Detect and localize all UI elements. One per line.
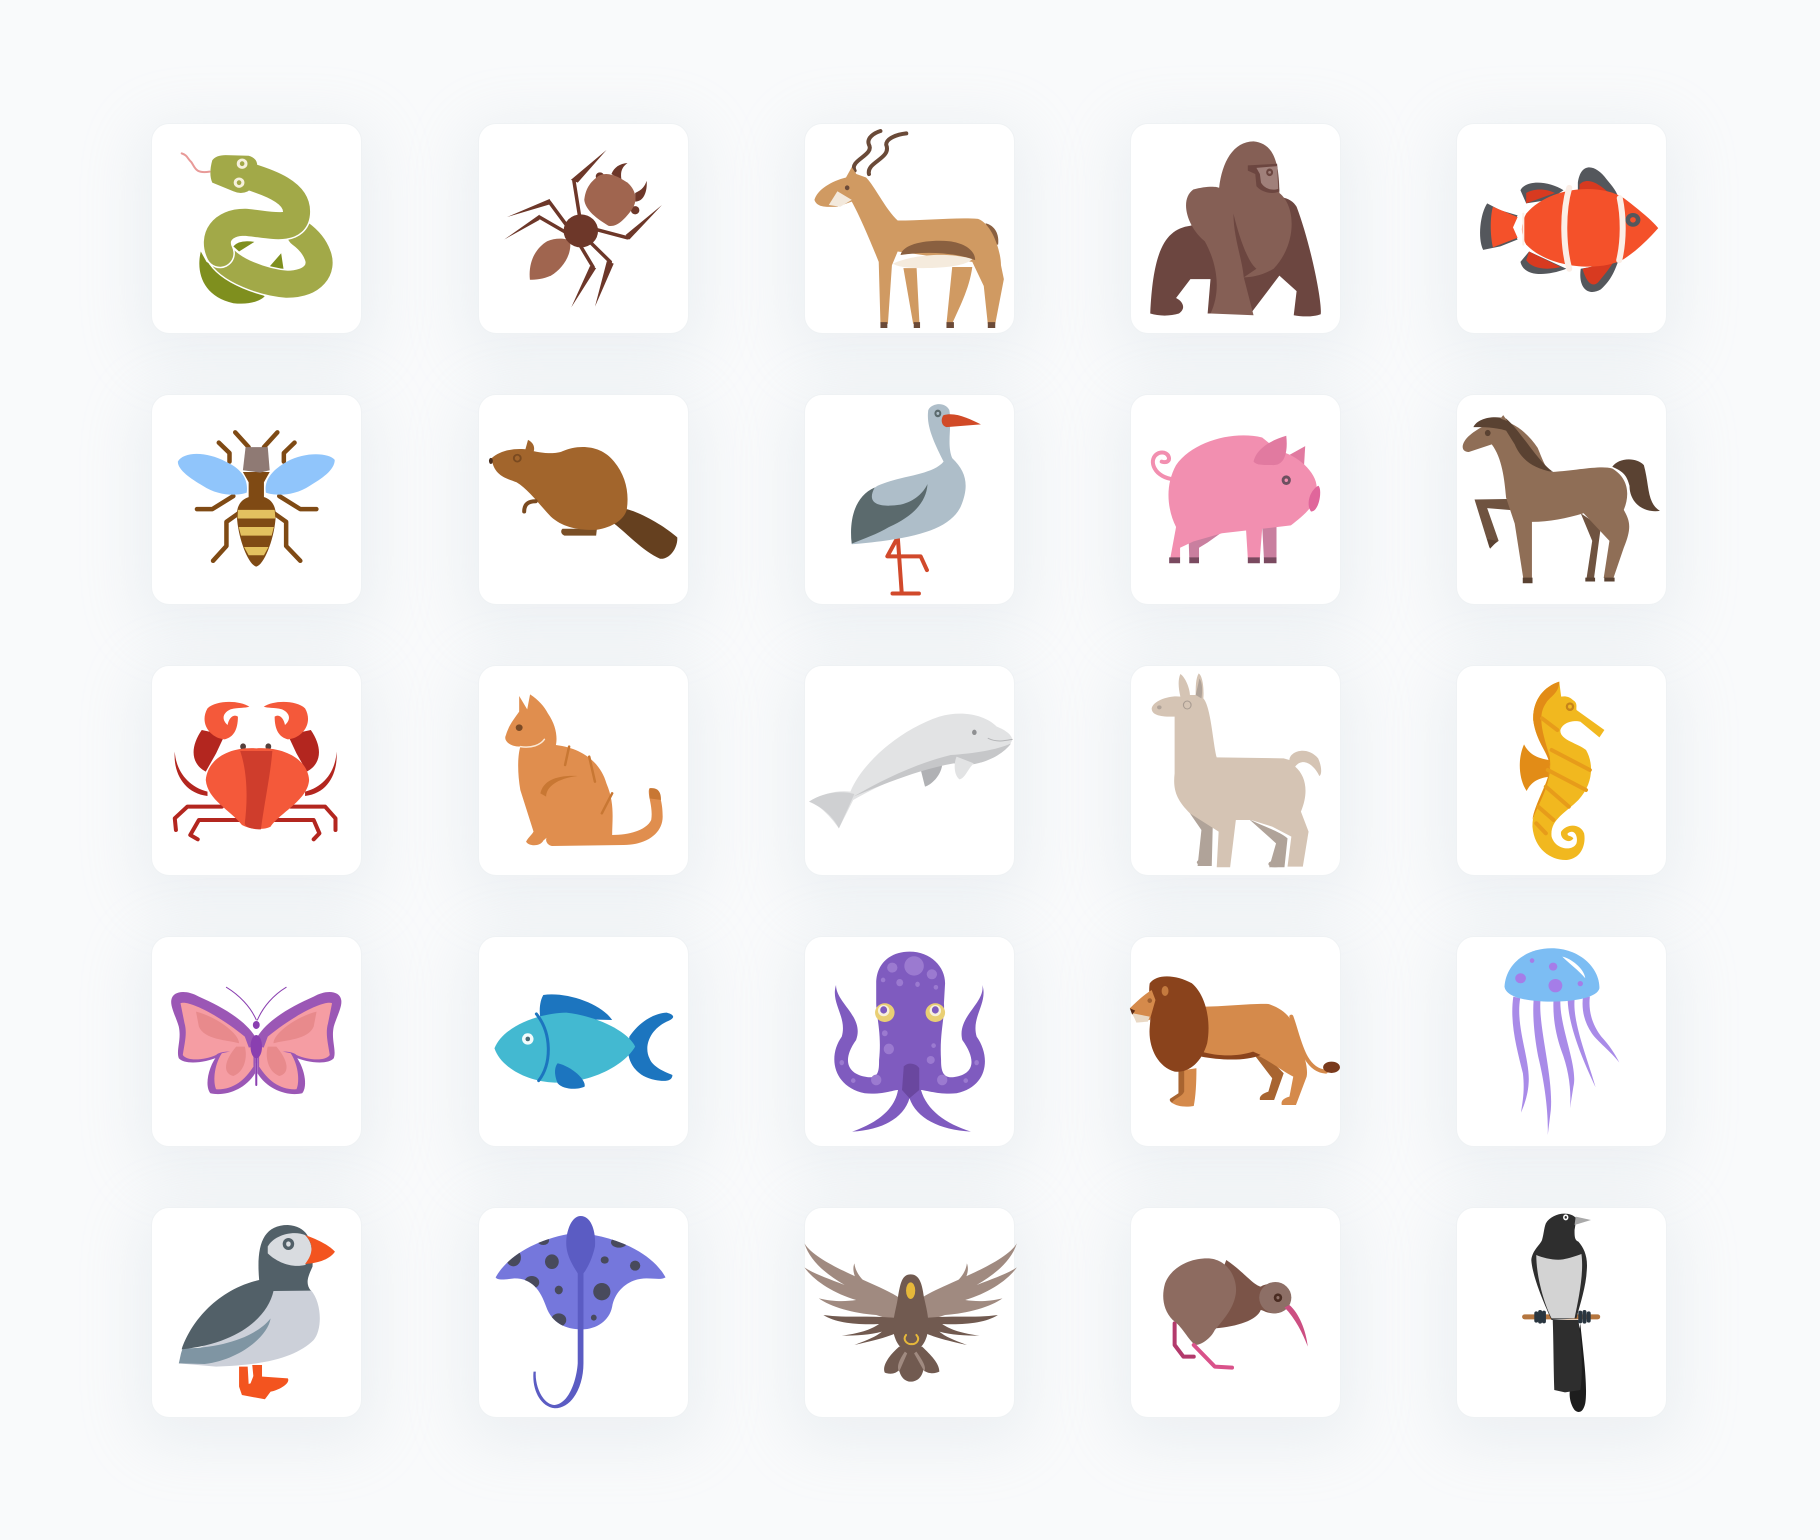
panel: puffin card [151,1207,362,1418]
panel: snake card [151,123,362,334]
panel: pig card [1130,394,1341,605]
icon: crab [175,702,337,839]
icon: butterfly [171,987,341,1094]
icon: llama [1152,673,1321,867]
panel: clownfish card [1456,123,1667,334]
icon: puffin [179,1225,335,1399]
icon: lion [1130,976,1340,1107]
panel: magpie card [1456,1207,1667,1418]
icon: pig [1153,435,1320,563]
panel: kiwi card [1130,1207,1341,1418]
panel: crab card [151,665,362,876]
panel: lion card [1130,936,1341,1147]
body and antennae [226,987,286,1085]
panel: wasp card [151,394,362,605]
panel: butterfly card [151,936,362,1147]
icon: clownfish [1480,167,1658,292]
icon: crane [851,404,981,594]
left wing [804,1243,902,1345]
icon: beaver [489,440,677,559]
panel: ant card [478,123,689,334]
panel: eagle card [804,1207,1015,1418]
icon: magpie [1522,1214,1600,1412]
tail [884,1347,939,1382]
icon: octopus [834,952,985,1132]
icon: beluga whale [809,714,1012,828]
icon: jellyfish [1505,948,1619,1135]
panel: llama card [1130,665,1341,876]
icon: kiwi [1163,1258,1308,1368]
panel: horse card [1456,394,1667,605]
icon: blue fish [494,994,673,1089]
panel: beaver card [478,394,689,605]
icon: stingray [496,1216,666,1408]
panel: jellyfish card [1456,936,1667,1147]
panel: crane card [804,394,1015,605]
icon: snake [182,153,319,304]
icon: ant [504,150,662,307]
icon: gorilla [1150,141,1321,316]
panel: cat card [478,665,689,876]
icon: horse [1463,415,1660,583]
panel: blue fish card [478,936,689,1147]
panel: seahorse card [1456,665,1667,876]
panel: whale card [804,665,1015,876]
panel: gorilla card [1130,123,1341,334]
panel: gazelle card [804,123,1015,334]
icon: eagle [804,1243,1017,1382]
icon: gazelle [814,131,1004,328]
panel: octopus card [804,936,1015,1147]
right wing [919,1243,1017,1345]
icon: wasp [178,432,335,567]
icon: cat [505,694,663,846]
left wing [171,992,255,1094]
icon layer [171,129,1660,1412]
right wing [257,992,341,1094]
panel: stingray card [478,1207,689,1418]
icon: seahorse [1520,682,1604,860]
